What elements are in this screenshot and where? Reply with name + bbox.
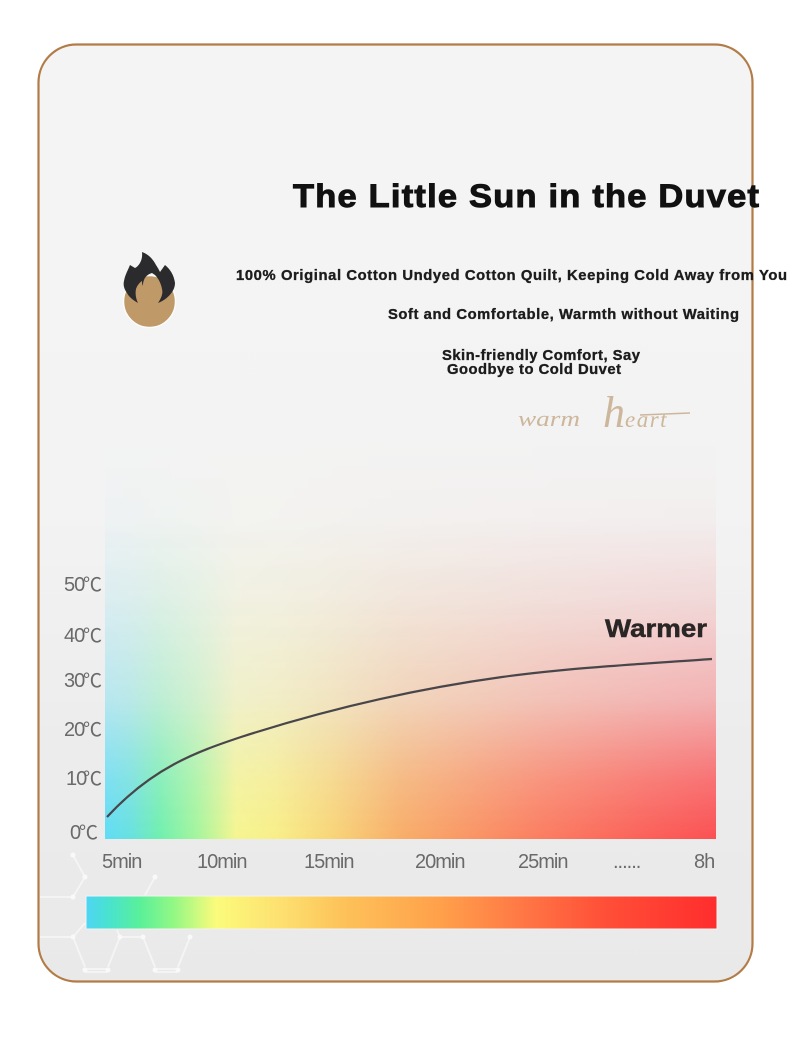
y axis labels: 0	[70, 822, 80, 844]
feature line 1: 100% Original Cotton Undyed Cotton Quilt, Keeping Cold Away from You	[236, 268, 787, 284]
title: The Little Sun in the Duvet	[293, 179, 759, 215]
y axis labels: ℃	[83, 626, 102, 647]
signature: warm heart: warm	[518, 406, 580, 431]
x axis labels: 25min	[518, 851, 567, 873]
signature: warm heart: heart	[603, 388, 668, 437]
text block: feature lines	[236, 268, 787, 378]
x axis labels	[102, 851, 714, 873]
y axis labels: 50	[64, 574, 84, 596]
y axis labels: ℃	[83, 769, 102, 790]
chart curve	[107, 659, 712, 817]
y axis labels: ℃	[83, 671, 102, 692]
x axis labels: 20min	[415, 851, 464, 873]
y axis labels: ℃	[83, 575, 102, 596]
y axis labels: 10	[66, 768, 86, 790]
colour scale bar	[86, 896, 717, 929]
callout: Warmer: Warmer	[605, 615, 707, 643]
feature line 2: Soft and Comfortable, Warmth without Waiting	[388, 307, 739, 323]
decoration: hexagon network	[40, 852, 192, 972]
x axis labels: 5min	[102, 851, 141, 873]
feature line 4: Goodbye to Cold Duvet	[447, 362, 621, 378]
chart: temperature curve on colour field	[64, 532, 716, 868]
y axis labels: ℃	[83, 720, 102, 741]
y axis labels: ℃	[79, 823, 98, 844]
y axis labels: 20	[64, 719, 84, 741]
y axis labels	[64, 574, 102, 844]
x axis labels: 8h	[694, 851, 714, 873]
signature: warm heart	[518, 388, 690, 437]
x axis labels: ......	[613, 851, 640, 873]
feature line 3: Skin-friendly Comfort, Say	[442, 348, 641, 364]
icon: flame over circle	[124, 252, 176, 328]
y axis labels: 40	[64, 625, 84, 647]
chart colour field	[105, 532, 716, 839]
x axis labels: 10min	[197, 851, 246, 873]
x axis labels: 15min	[304, 851, 353, 873]
y axis labels: 30	[64, 670, 84, 692]
